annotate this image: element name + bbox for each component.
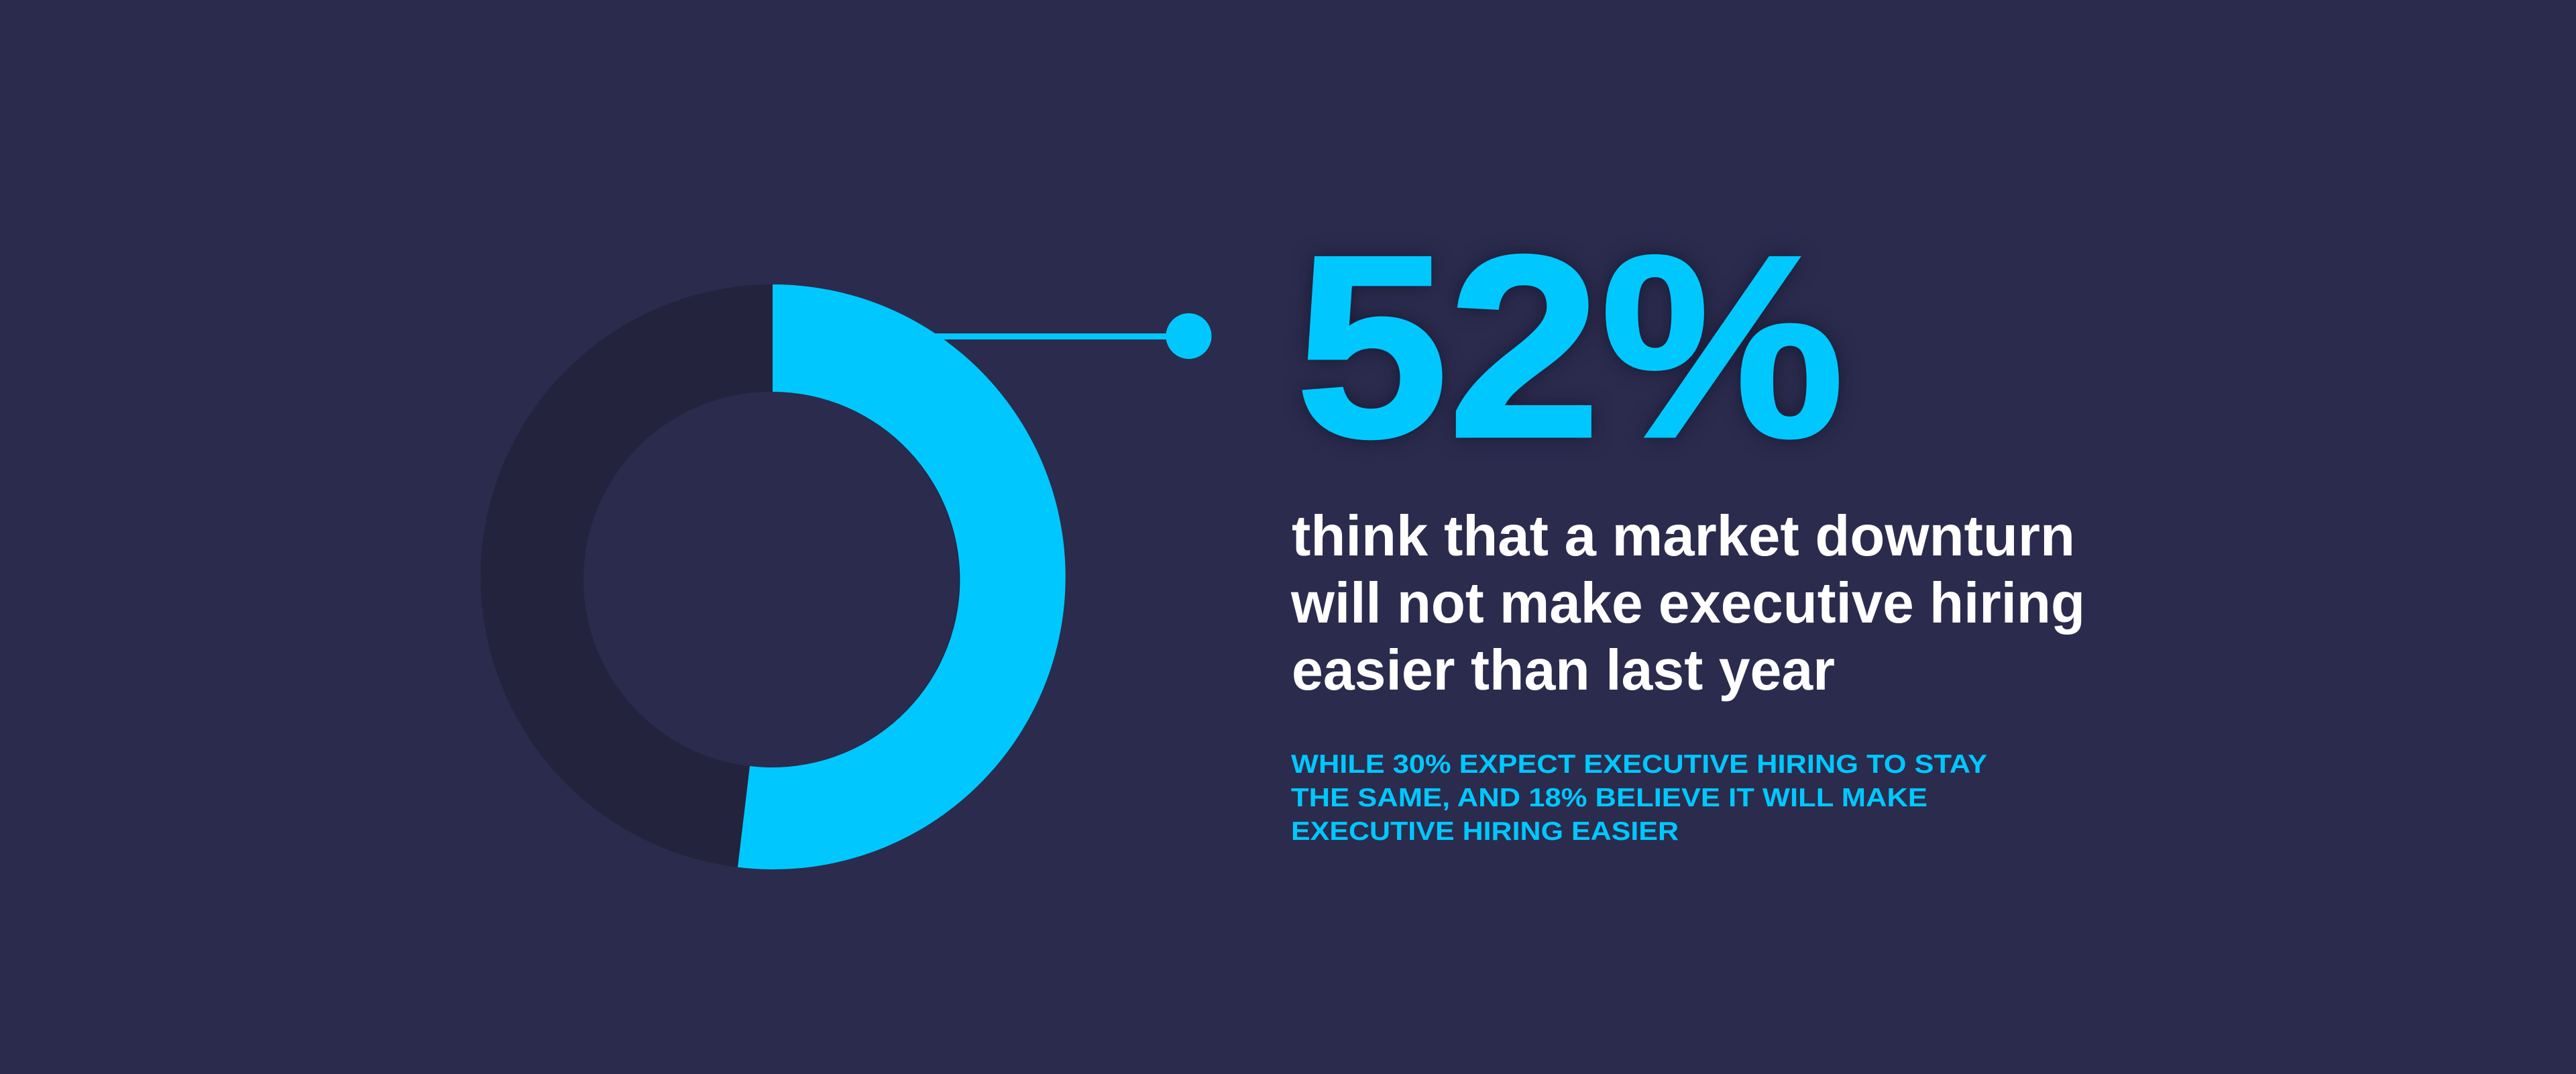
supporting note: THE SAME, AND 18% BELIEVE IT WILL MAKE xyxy=(1291,784,1927,812)
supporting note: WHILE 30% EXPECT EXECUTIVE HIRING TO STAY xyxy=(1291,750,1987,779)
connector dot xyxy=(1166,313,1211,359)
supporting note xyxy=(1291,750,1987,846)
donut segment: remaining 48% xyxy=(480,284,1065,869)
description text: will not make executive hiring xyxy=(1290,572,2085,635)
donut segment: 52% xyxy=(738,284,1066,869)
description text xyxy=(1290,504,2085,702)
connector line xyxy=(932,333,1167,339)
description text: easier than last year xyxy=(1292,639,1835,702)
supporting note: EXECUTIVE HIRING EASIER xyxy=(1291,817,1679,846)
donut chart xyxy=(480,284,1066,869)
description text: think that a market downturn xyxy=(1292,504,2075,568)
big statistic: 52%: 52% xyxy=(1296,202,1844,491)
